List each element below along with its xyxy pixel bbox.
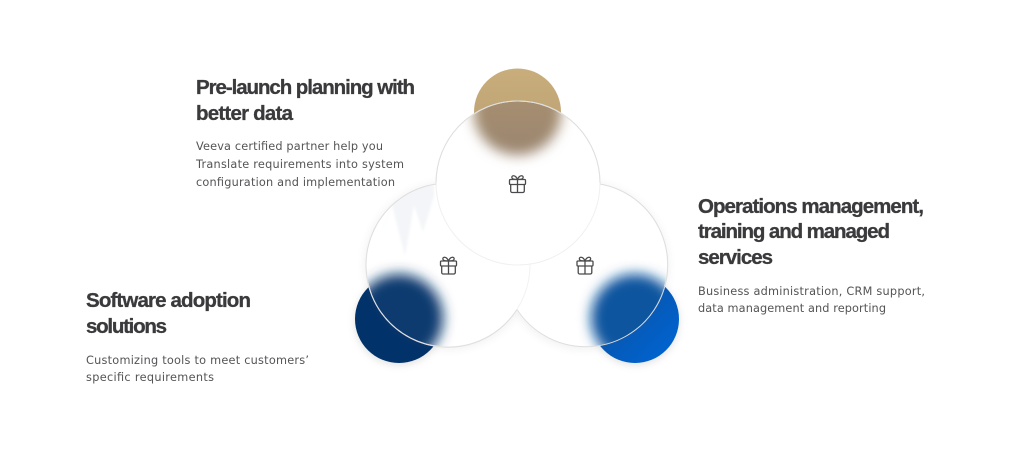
text block: pre-launch planning: Veeva certified partner help you <box>196 140 383 153</box>
glass circle: left <box>366 186 530 346</box>
text block: pre-launch planning: configuration and implementation <box>196 176 395 189</box>
text block: operations management: data management and reporting <box>698 302 886 315</box>
text block: software adoption: specific requirements <box>86 371 214 384</box>
glass circle: right <box>518 186 667 346</box>
icon: gift top <box>510 176 526 192</box>
glass outer outline <box>366 101 668 347</box>
glass circle: top <box>436 100 600 266</box>
text block: pre-launch planning: Pre-launch planning with <box>196 76 415 99</box>
icon: gift left <box>440 257 456 274</box>
icon: gift right <box>577 257 593 274</box>
text block: pre-launch planning <box>195 76 415 189</box>
faint reflection <box>393 185 434 250</box>
text block: operations management: services <box>698 246 773 269</box>
orb: blue <box>591 275 679 365</box>
text block: software adoption: Customizing tools to meet customers’ <box>86 354 309 367</box>
text block: operations management: Business administration, CRM support, <box>698 285 925 298</box>
orb: tan <box>474 68 561 156</box>
text block: operations management: training and managed <box>698 220 890 243</box>
glass shadow <box>364 182 669 350</box>
orb: navy <box>355 275 443 365</box>
text block: software adoption <box>86 289 309 384</box>
text block: pre-launch planning: better data <box>196 102 294 125</box>
diagram: three overlapping glass circles <box>355 67 679 365</box>
text block: software adoption: solutions <box>86 315 167 338</box>
text block: software adoption: Software adoption <box>86 289 251 312</box>
text block: pre-launch planning: Translate requirements into system <box>195 158 404 171</box>
text block: operations management <box>698 195 925 315</box>
text block: operations management: Operations management, <box>698 195 924 218</box>
